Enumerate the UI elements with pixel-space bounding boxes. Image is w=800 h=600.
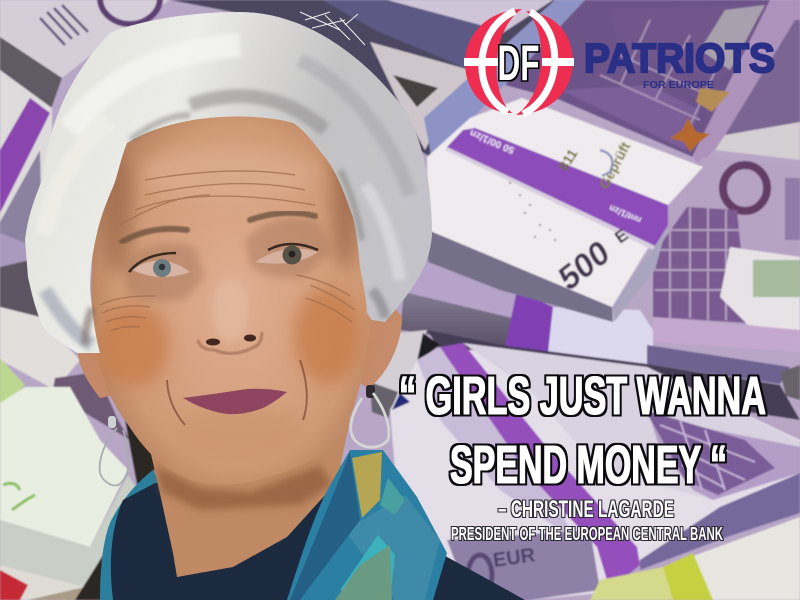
bundle: middle right with purple band [400,262,800,420]
nose [198,278,262,354]
right eye [255,244,318,264]
bundle: main 500 note with purple band: 500 [553,233,615,299]
note: grey stack right of the ear [370,330,440,418]
bundle: main 500 note with purple band [427,98,703,322]
neck [150,420,350,577]
logo: DF party roundel [464,9,574,115]
portrait: woman with silver hair [25,12,525,600]
bundle: main 500 note with purple band: 811 [555,146,581,174]
bundle: main 500 note with purple band: E [611,225,632,247]
quote headline [399,366,766,495]
face shading: cheeks and shadows [97,130,362,463]
flyaway hairs [300,12,365,45]
bundle: main 500 note with purple band: Geprüft [596,139,634,191]
logo: Patriots for Europe wordmark: PATRIOTS [584,35,775,81]
hair [25,12,432,353]
mouth [183,389,287,414]
eyebrows [122,213,315,242]
bundle: bottom right main stack: EUR [492,544,537,572]
left eye [129,253,190,277]
earring: right hoop [351,385,389,447]
bundle: top left notes [0,0,170,440]
scarf right piece [287,450,447,600]
smile lines [167,360,307,425]
scarf left piece [100,470,170,600]
earring: left hoop [100,416,129,485]
sweater [111,465,525,600]
note: bottom left white and green bundle [0,358,160,600]
attribution: Christine Lagarde: – CHRISTINE LAGARDE [498,496,674,523]
bundle: main 500 note with purple band: nnt/1/zn [608,203,643,225]
face [91,92,372,485]
hair shadows and strands [45,45,410,345]
logo letters DF: DF [498,35,540,91]
note: right large 500 euro [653,157,800,352]
logo: Patriots for Europe wordmark: FOR EUROPE [643,80,714,91]
neck shadow under the chin [155,465,332,510]
facial wrinkles [100,171,355,331]
left ear [77,345,115,398]
right ear [355,308,402,388]
bundle: top middle lilac and periwinkle stack [170,0,585,160]
bundle: bottom right main stack [390,343,800,600]
bundle: main 500 note with purple band: 50 00/1/zn [468,127,516,155]
bundle: top right purple note [505,0,800,165]
